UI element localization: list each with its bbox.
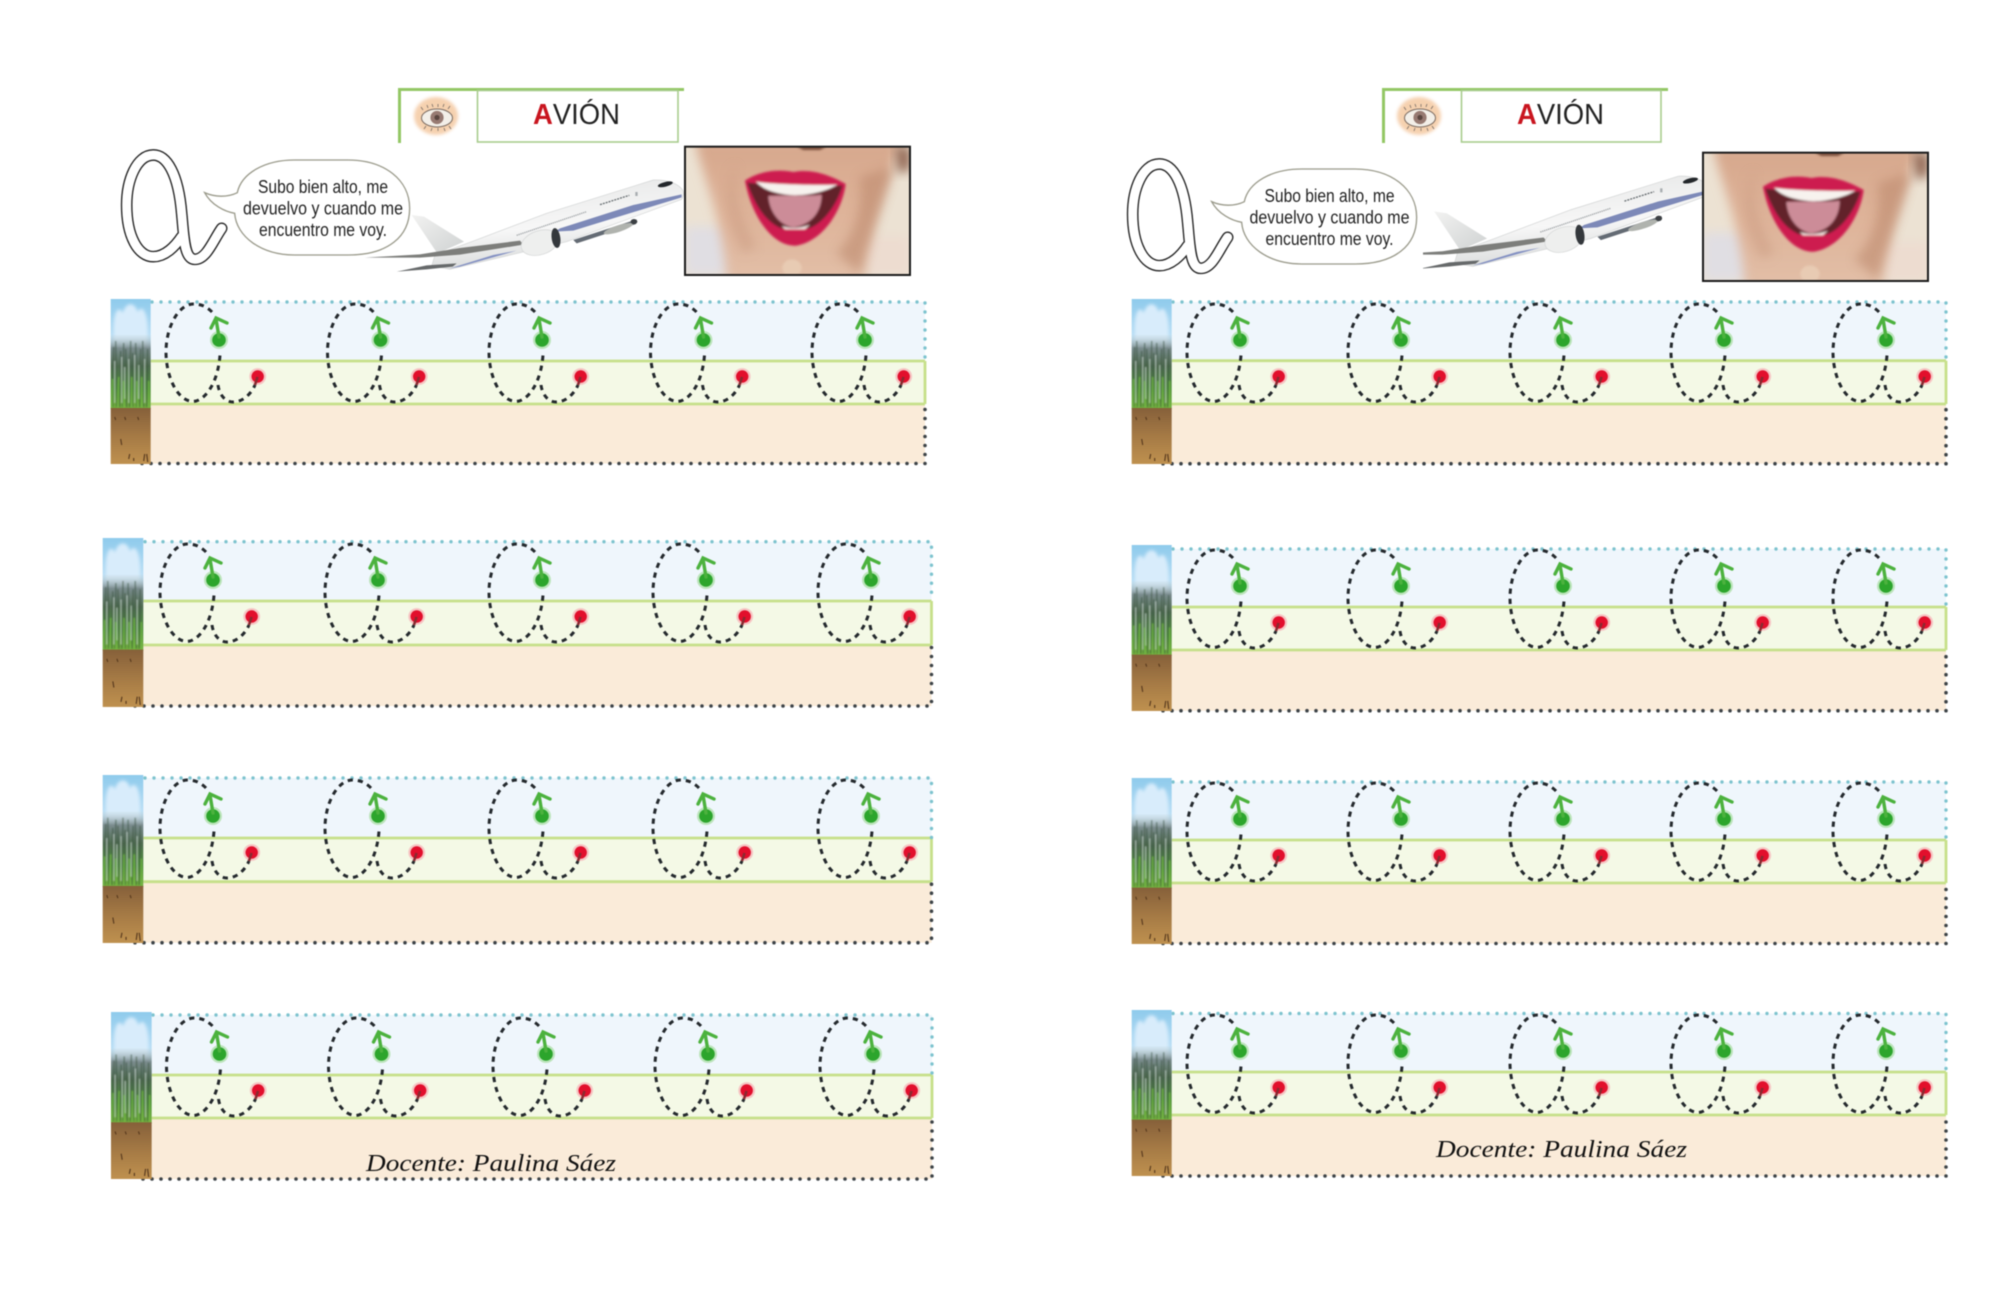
right row 2	[1132, 545, 1946, 711]
left row 3	[103, 775, 931, 943]
word: AVIÓN: AVIÓN	[1517, 99, 1604, 131]
traced letters	[166, 1018, 920, 1116]
left row 1	[111, 299, 925, 464]
credit text: Docente: Paulina Sáez	[1435, 1137, 1688, 1163]
traced letters	[160, 780, 918, 878]
left airplane	[365, 180, 684, 272]
left speech bubble: devuelvo y cuando me	[243, 198, 403, 218]
right letter a outline	[1133, 164, 1228, 268]
right row 1	[1132, 299, 1946, 464]
left speech bubble	[205, 160, 410, 255]
right speech bubble: encuentro me voy.	[1266, 229, 1394, 249]
right row 4	[1132, 1010, 1946, 1176]
right speech bubble: devuelvo y cuando me	[1250, 208, 1410, 228]
traced letters	[166, 304, 912, 402]
right airplane	[1422, 175, 1703, 270]
icon: eye	[1397, 97, 1441, 135]
landscape strip	[103, 538, 143, 707]
traced letters	[1187, 1015, 1933, 1113]
traced letters	[1187, 550, 1933, 648]
landscape strip	[103, 775, 143, 943]
right row 3	[1132, 778, 1946, 944]
traced letters	[1187, 304, 1933, 402]
right speech bubble	[1212, 169, 1417, 264]
left mouth photo	[685, 140, 910, 283]
icon: eye	[414, 97, 458, 135]
credit text: Docente: Paulina Sáez	[365, 1151, 617, 1177]
left row 2	[103, 538, 931, 707]
landscape strip	[1132, 1010, 1172, 1176]
landscape strip	[111, 1012, 152, 1179]
left speech bubble: encuentro me voy.	[259, 220, 387, 240]
left speech bubble: Subo bien alto, me	[258, 177, 388, 197]
left worksheet header: word card	[400, 90, 684, 143]
landscape strip	[111, 299, 151, 464]
landscape strip	[1132, 299, 1172, 464]
right worksheet header: word card	[1384, 90, 1668, 143]
word: AVIÓN: AVIÓN	[533, 99, 620, 131]
traced letters	[1187, 783, 1933, 881]
right speech bubble: Subo bien alto, me	[1264, 186, 1394, 206]
landscape strip	[1132, 778, 1172, 944]
landscape strip	[1132, 545, 1172, 711]
left letter a outline	[127, 155, 222, 259]
left row 4	[111, 1012, 932, 1179]
traced letters	[160, 544, 918, 642]
right mouth photo	[1703, 146, 1928, 289]
